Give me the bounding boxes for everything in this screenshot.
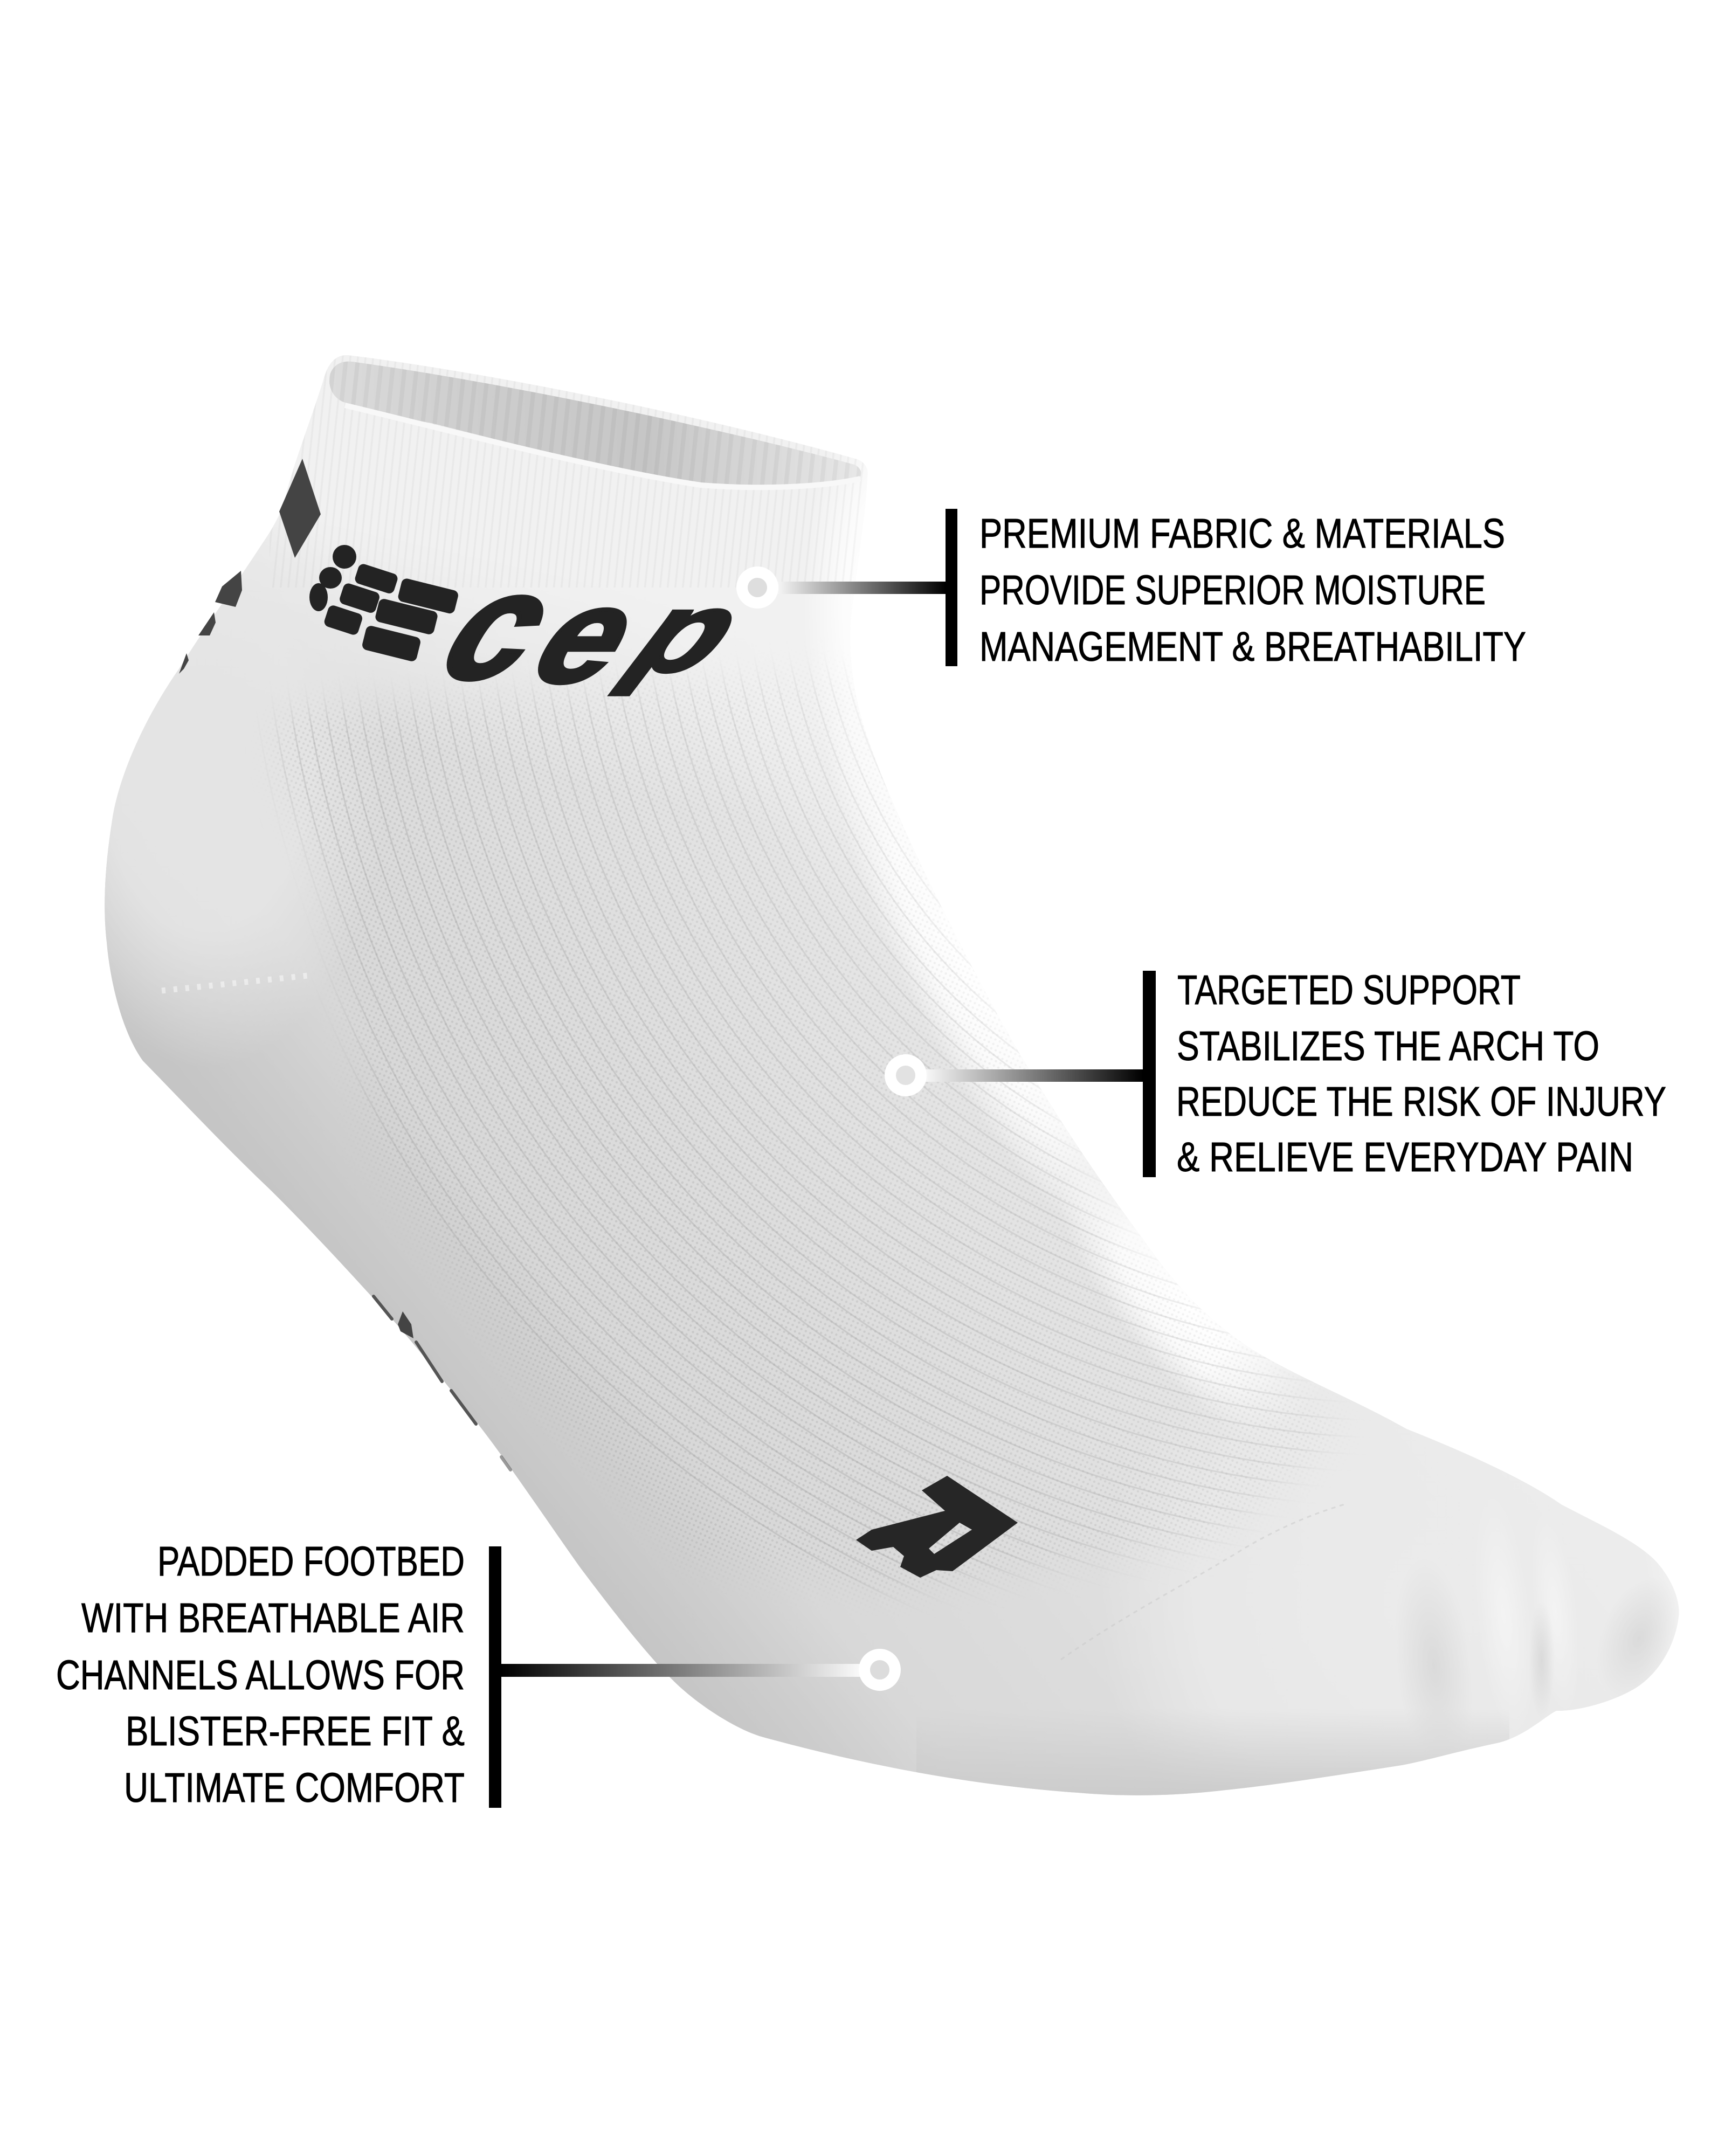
vertical bar xyxy=(946,509,957,666)
callout text: MANAGEMENT & BREATHABILITY xyxy=(979,624,1526,670)
sock photo illustration xyxy=(105,355,1679,1795)
marker ring xyxy=(865,1655,895,1685)
callout text: TARGETED SUPPORT xyxy=(1177,967,1521,1013)
callout text: WITH BREATHABLE AIR xyxy=(81,1595,465,1641)
callout text xyxy=(979,510,1526,670)
brand wordmark cep: e xyxy=(505,560,673,710)
sock body with shading xyxy=(105,355,1679,1795)
connector line xyxy=(919,1069,1143,1082)
marker ring xyxy=(742,572,773,603)
callout text: ULTIMATE COMFORT xyxy=(124,1765,465,1811)
brand wordmark cep: c xyxy=(410,542,592,710)
cuff opening interior xyxy=(329,362,861,486)
callout text xyxy=(1176,967,1666,1180)
cuff rim highlight xyxy=(345,405,860,487)
callout text: CHANNELS ALLOWS FOR xyxy=(56,1652,465,1698)
callout: premium fabric xyxy=(742,509,1526,670)
callout: targeted support xyxy=(891,967,1666,1180)
callout text xyxy=(56,1538,465,1811)
callout text: BLISTER-FREE FIT & xyxy=(126,1708,465,1754)
knit and curved ribs xyxy=(275,672,1334,1599)
heel logo fragments xyxy=(179,571,242,674)
vertical bar xyxy=(489,1546,501,1808)
callout text: PADDED FOOTBED xyxy=(157,1538,465,1585)
marker ring xyxy=(891,1060,921,1091)
brand wordmark cep: p xyxy=(600,569,779,696)
callout text: PREMIUM FABRIC & MATERIALS xyxy=(979,510,1505,557)
callout text: & RELIEVE EVERYDAY PAIN xyxy=(1177,1134,1633,1180)
callout: padded footbed xyxy=(56,1538,895,1811)
vertical bar xyxy=(1143,971,1156,1177)
toe creases xyxy=(1385,1491,1696,1777)
connector line xyxy=(771,582,946,594)
callout text: STABILIZES THE ARCH TO xyxy=(1177,1023,1599,1069)
heel diamond mark xyxy=(279,459,321,558)
sole logo fragments xyxy=(374,1296,510,1470)
callout text: PROVIDE SUPERIOR MOISTURE xyxy=(979,567,1486,613)
connector line xyxy=(501,1664,868,1677)
brand mark dots and bars xyxy=(309,545,459,662)
brand wordmark cep xyxy=(410,542,779,710)
toe logo mark xyxy=(856,1476,1018,1578)
